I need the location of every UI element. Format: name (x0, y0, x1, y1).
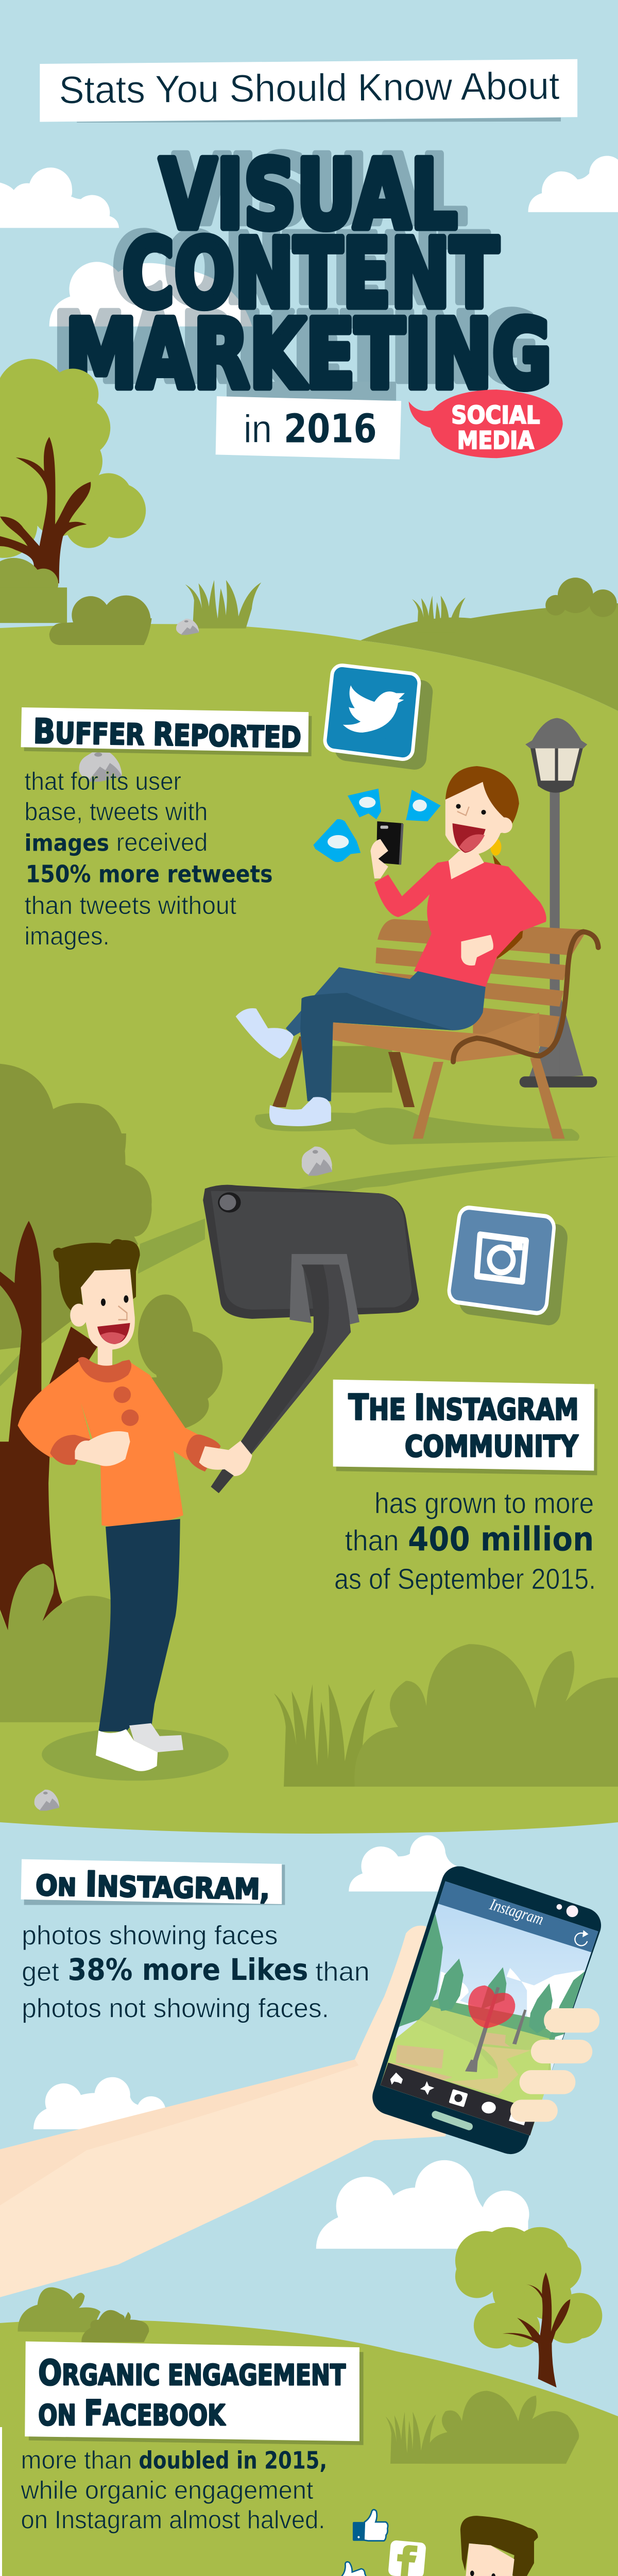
body text: 38% more likes: 38% more Likes (68, 1952, 308, 1987)
heading: on instagram: ON INSTAGRAM, (36, 1862, 270, 1907)
body text: 38% more likes: photos not showing faces. (22, 1994, 329, 2024)
shrubs under tree (0, 558, 150, 645)
body text: 400 million: has grown to more (374, 1487, 594, 1520)
tree right (455, 2227, 602, 2387)
heading text: instagram community: COMMUNITY (405, 1430, 579, 1464)
rock (176, 619, 199, 635)
woman on bench with phone (236, 766, 598, 1145)
heading: organic engagement on facebook: ORGANIC ENGAGEMENT (38, 2352, 346, 2393)
body text: 38% more likes: photos showing faces (22, 1921, 278, 1951)
man standing with phone (392, 2516, 551, 2576)
heading text: instagram community (349, 1387, 579, 1464)
body text: 38% more likes (22, 1921, 370, 2024)
body text: 400 million: 400 million (408, 1520, 594, 1559)
title: CONTENT (122, 219, 499, 329)
body text: buffer: images. (24, 923, 110, 951)
thumbs up icons (328, 2510, 455, 2576)
body text: doubled in 2015 (21, 2446, 327, 2534)
subtitle banner: Stats You Should Know About (59, 64, 560, 112)
rock (302, 1146, 332, 1171)
body text: buffer: 150% more retweets (26, 860, 273, 888)
tree trunk left (0, 1221, 98, 1630)
man shadow (42, 1728, 229, 1781)
grass tuft (385, 2412, 436, 2464)
heading box: instagram community (333, 1380, 597, 1475)
shrub on hill (49, 618, 152, 645)
heading text: instagram community: THE INSTAGRAM (349, 1387, 578, 1429)
grass tuft (185, 580, 261, 629)
body text: buffer: received (116, 829, 208, 857)
heading: organic engagement on facebook: ON FACEBOOK (38, 2393, 226, 2433)
body text: buffer: images (24, 831, 109, 857)
path stripe on lawn (339, 1157, 618, 1190)
in 2016 label (216, 396, 401, 460)
heading: organic engagement on facebook (25, 2342, 364, 2445)
big shrub left (0, 1133, 222, 1432)
street lamp (520, 718, 597, 1088)
title shadow (53, 135, 538, 403)
background: lower green hill (0, 2320, 618, 2576)
social media speech bubble (409, 389, 563, 458)
title shadow: VISUAL (174, 135, 467, 245)
title (65, 141, 552, 410)
background: top right far hill (360, 603, 618, 711)
body text: buffer: than tweets without (24, 892, 237, 920)
shrubs on hilltop (18, 2287, 149, 2342)
body text: buffer: base, tweets with (24, 798, 208, 826)
title shadow: CONTENT (112, 214, 489, 324)
fingers (510, 2008, 599, 2122)
phone with park photo (374, 1878, 611, 2142)
arm holding phone (0, 1926, 473, 2297)
path stripe across lawn (0, 1157, 618, 1386)
body text: doubled in 2015: on Instagram almost halved. (21, 2506, 325, 2534)
tweet bubbles (313, 789, 441, 862)
facebook icons (352, 2540, 440, 2576)
heading: buffer reported: BUFFER REPORTED (33, 711, 302, 756)
shrub top right (545, 578, 617, 617)
phone with park photo: Instagram (487, 1894, 546, 1928)
cloud (349, 1835, 477, 1891)
social media speech bubble: MEDIA (457, 427, 534, 455)
cloud right (528, 156, 618, 212)
cloud (316, 2160, 529, 2249)
tree top left (0, 359, 146, 584)
body text: buffer (24, 768, 273, 951)
rock behind text (79, 749, 122, 782)
social media speech bubble: SOCIAL (451, 401, 540, 430)
shrub lower right (354, 1644, 618, 1787)
big shrub top (0, 1064, 152, 1236)
in 2016 label shadow (227, 382, 396, 401)
in 2016 label: 2016 (284, 406, 377, 452)
twitter icon (335, 675, 421, 758)
in 2016 label: in (244, 408, 272, 451)
left white edge strip (0, 2427, 2, 2576)
shrub (425, 2391, 579, 2464)
body text: 38% more likes: than (315, 1957, 370, 1987)
grass tuft right (412, 596, 466, 633)
body text: buffer: that for its user (24, 768, 181, 795)
body text: doubled in 2015: while organic engagement (21, 2477, 314, 2504)
cloud left (0, 167, 119, 228)
man taking selfie (18, 1239, 252, 1771)
body text: 38% more likes: get (22, 1957, 59, 1987)
body text: 400 million (334, 1487, 596, 1596)
lower left shrub (0, 1564, 112, 1722)
cloud (33, 2077, 166, 2129)
title: VISUAL (160, 141, 457, 250)
cloud behind title (49, 262, 252, 327)
body text: doubled in 2015: more than (21, 2446, 132, 2474)
instagram icon (459, 1219, 556, 1312)
rock (302, 1147, 332, 1176)
body text: 400 million: than (345, 1525, 399, 1557)
body text: doubled in 2015: doubled in 2015, (139, 2446, 327, 2474)
selfie stick phone (203, 1185, 419, 1493)
grass tuft (274, 1684, 375, 1787)
background: upper green hill (0, 624, 618, 1834)
rock (35, 1790, 59, 1811)
